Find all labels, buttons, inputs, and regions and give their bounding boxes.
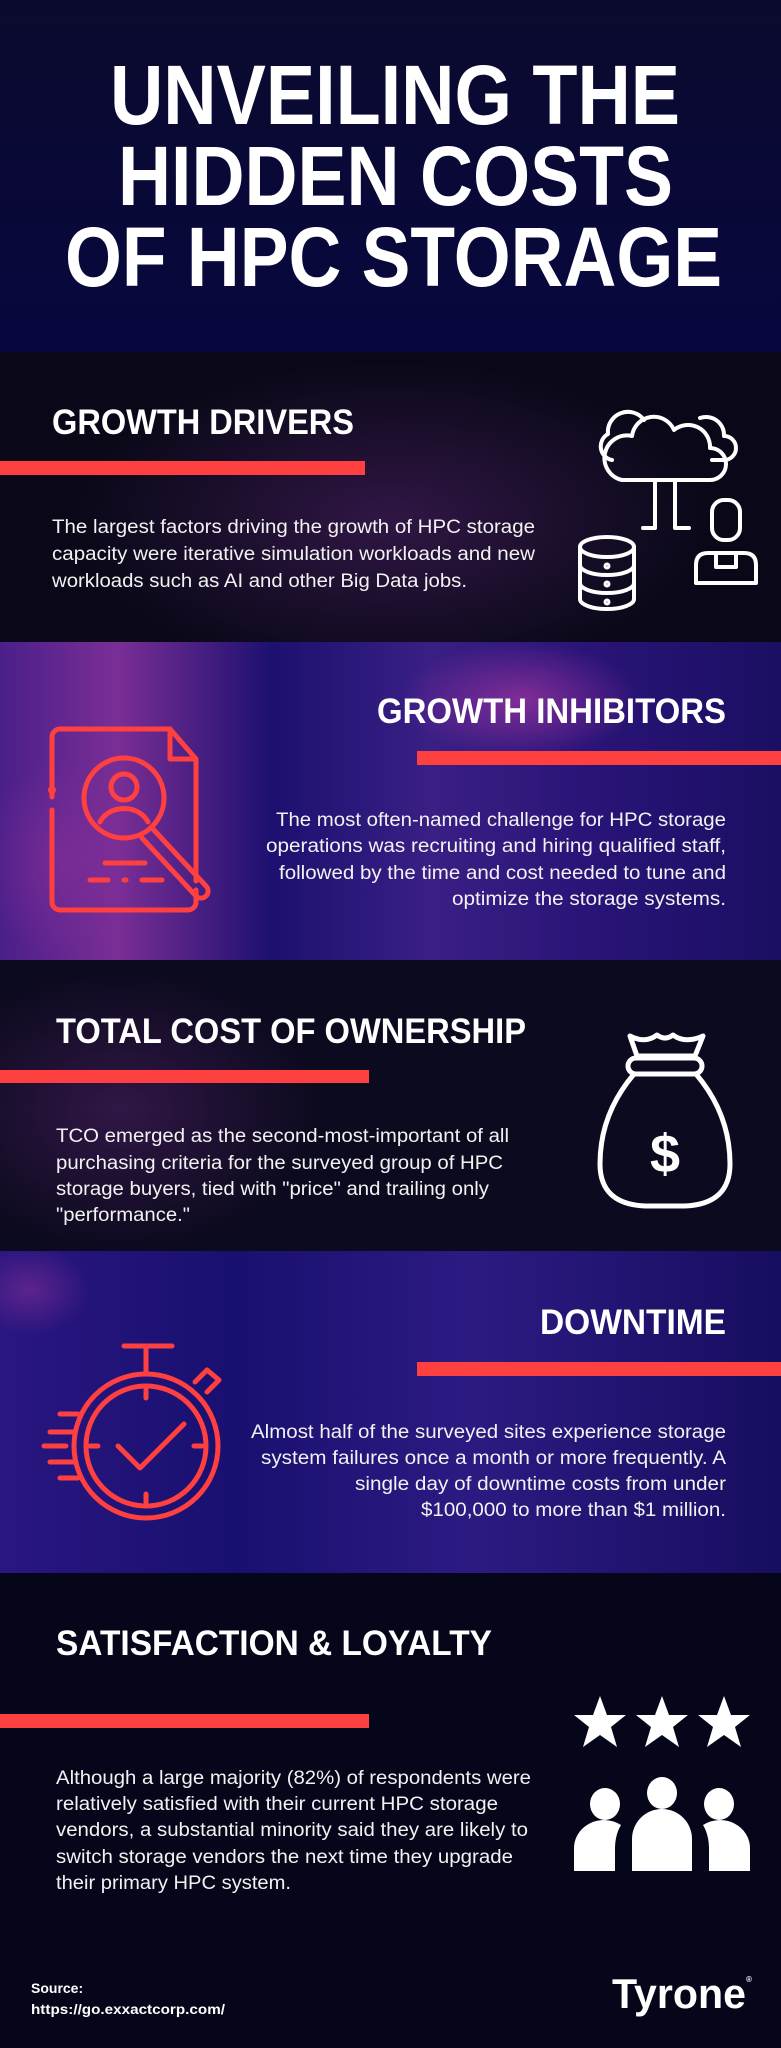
text: downtime: Almost half of the surveyed sites experience storage xyxy=(251,1422,726,1443)
icon: stars and people xyxy=(574,1696,750,1871)
text: tco: storage buyers, tied with "price" and trailing only xyxy=(56,1179,490,1200)
source: Source: xyxy=(31,1980,83,1996)
text: growth drivers: The largest factors driving the growth of HPC storage xyxy=(52,517,535,538)
text: downtime: $100,000 to more than $1 million. xyxy=(421,1500,726,1521)
title xyxy=(65,48,722,304)
text: downtime: system failures once a month or more frequently. A xyxy=(261,1448,726,1469)
text: growth inhibitors: operations was recruiting and hiring qualified staff, xyxy=(266,836,726,857)
text: satisfaction: switch storage vendors the next time they upgrade xyxy=(56,1847,513,1868)
text: satisfaction xyxy=(56,1768,531,1894)
icon: stopwatch xyxy=(44,1346,219,1518)
text: growth inhibitors xyxy=(266,810,726,910)
text: satisfaction: Although a large majority (82%) of respondents were xyxy=(56,1768,531,1789)
logo: tyrone: Tyrone xyxy=(612,1970,746,2017)
text: satisfaction: relatively satisfied with their current HPC storage xyxy=(56,1794,498,1815)
icon: money bag: $ xyxy=(650,1124,680,1184)
text: growth inhibitors: optimize the storage systems. xyxy=(452,889,726,910)
icon: cloud, database, user xyxy=(580,412,756,609)
heading: tco: TOTAL COST OF OWNERSHIP xyxy=(56,1012,526,1051)
panel: growth drivers xyxy=(0,373,758,642)
text: tco xyxy=(56,1126,509,1226)
panel: downtime xyxy=(0,1245,781,1573)
icon: document with magnifier xyxy=(50,729,208,910)
text: tco: TCO emerged as the second-most-important of all xyxy=(56,1126,509,1147)
heading: growth inhibitors: GROWTH INHIBITORS xyxy=(377,692,726,731)
title: UNVEILING THE xyxy=(110,48,680,142)
text: satisfaction: their primary HPC system. xyxy=(56,1873,291,1894)
heading: satisfaction: SATISFACTION & LOYALTY xyxy=(56,1624,492,1663)
text: satisfaction: vendors, a substantial minority said they are likely to xyxy=(56,1820,528,1841)
text: growth inhibitors: The most often-named challenge for HPC storage xyxy=(276,810,726,831)
text: tco: "performance." xyxy=(56,1205,190,1226)
text: growth drivers xyxy=(51,517,535,592)
source xyxy=(31,1980,225,2017)
panel: total cost of ownership xyxy=(0,974,732,1246)
text: tco: purchasing criteria for the surveyed group of HPC xyxy=(56,1153,503,1174)
header background xyxy=(0,0,781,352)
logo: tyrone: ® xyxy=(746,1975,752,1984)
panel: growth inhibitors xyxy=(0,642,781,960)
text: growth inhibitors: followed by the time and cost needed to tune and xyxy=(279,863,726,884)
heading: downtime: DOWNTIME xyxy=(540,1303,726,1342)
panel: satisfaction & loyalty xyxy=(0,1573,781,2048)
heading: growth drivers: GROWTH DRIVERS xyxy=(52,403,354,442)
text: growth drivers: workloads such as AI and other Big Data jobs. xyxy=(51,571,467,592)
title: HIDDEN COSTS xyxy=(118,129,673,223)
source: https://go.exxactcorp.com/ xyxy=(31,2001,225,2017)
icon: money bag xyxy=(600,1035,730,1206)
text: downtime xyxy=(251,1422,727,1521)
text: downtime: single day of downtime costs from under xyxy=(355,1474,727,1495)
text: growth drivers: capacity were iterative simulation workloads and new xyxy=(52,544,535,565)
